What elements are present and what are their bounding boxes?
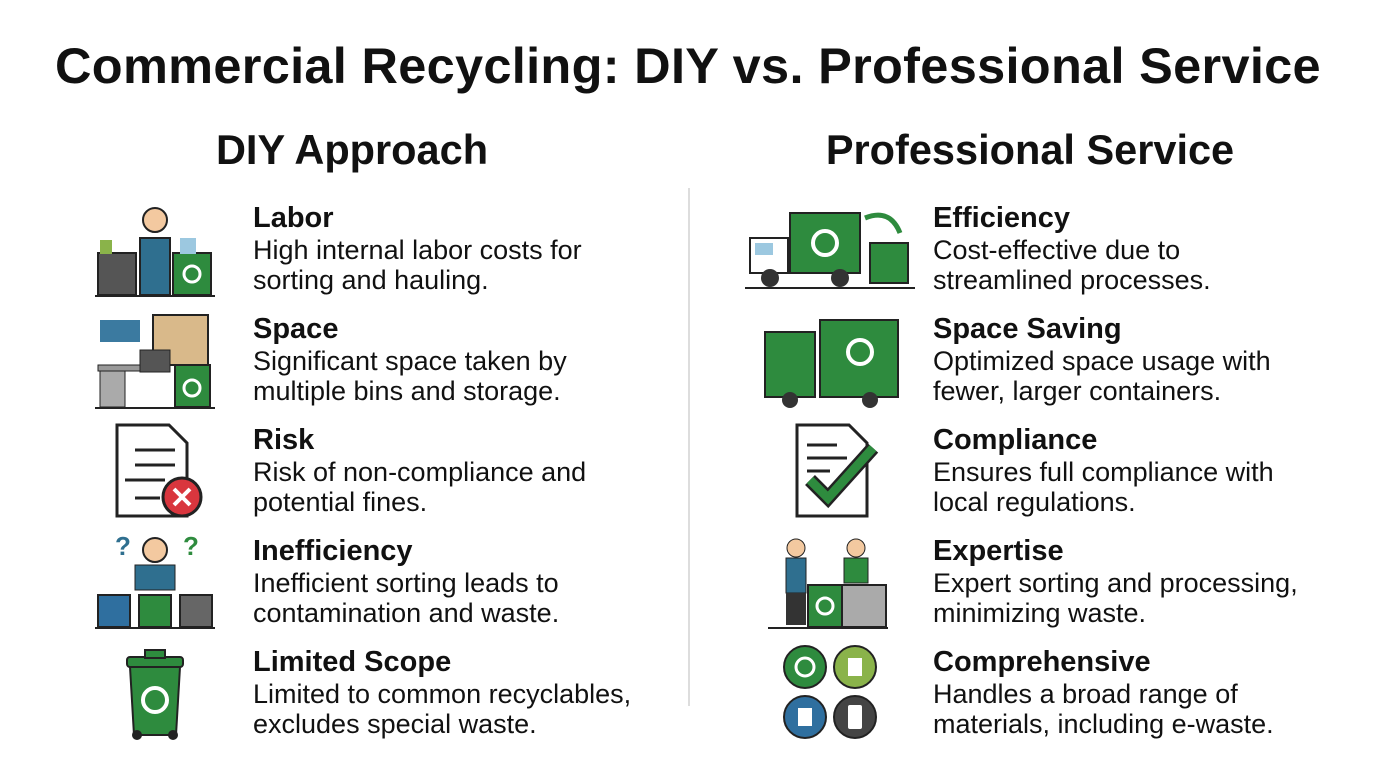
row: Inefficiency <box>253 535 559 628</box>
row: Space: Significant space taken by <box>253 346 567 376</box>
row: Compliance: Compliance <box>933 424 1097 456</box>
row: Efficiency <box>933 202 1211 295</box>
icon: document with check <box>796 424 878 518</box>
row: Space Saving: fewer, larger containers. <box>933 376 1221 406</box>
row: Space: Space <box>253 313 338 345</box>
row: Compliance: Ensures full compliance with <box>933 457 1274 487</box>
row: Compliance <box>933 424 1274 517</box>
title: Commercial Recycling: DIY vs. Professional Service <box>55 37 1321 94</box>
row: Inefficiency: Inefficient sorting leads to <box>253 568 559 598</box>
icon: confused person with bins <box>95 531 215 629</box>
row: Risk: Risk of non-compliance and <box>253 457 586 487</box>
row: Labor <box>253 202 582 295</box>
row: Expertise: Expertise <box>933 535 1064 567</box>
icon: confused person with bins: ? <box>183 531 199 561</box>
icon: document with red x <box>116 424 202 518</box>
row: Labor: High internal labor costs for <box>253 235 582 265</box>
icon: four material circles <box>783 645 877 739</box>
row: Efficiency: Efficiency <box>933 202 1070 234</box>
row: Expertise <box>933 535 1298 628</box>
row: Comprehensive: Comprehensive <box>933 646 1151 678</box>
row: Compliance: local regulations. <box>933 487 1136 517</box>
row: Efficiency: Cost-effective due to <box>933 235 1180 265</box>
row: Limited Scope: Limited Scope <box>253 646 451 678</box>
row: Space Saving: Space Saving <box>933 313 1122 345</box>
icon: stressed worker with bins <box>95 207 215 297</box>
row: Limited Scope: excludes special waste. <box>253 709 537 739</box>
row: Limited Scope <box>253 646 631 739</box>
row: Comprehensive: materials, including e-waste. <box>933 709 1274 739</box>
row: Space: multiple bins and storage. <box>253 376 561 406</box>
icon: single green bin <box>126 649 184 740</box>
row: Risk: potential fines. <box>253 487 427 517</box>
icon: recycling truck <box>745 212 915 289</box>
row: Expertise: Expert sorting and processing, <box>933 568 1298 598</box>
row: Efficiency: streamlined processes. <box>933 265 1211 295</box>
row: Space Saving <box>933 313 1271 406</box>
icon: workers sorting <box>768 538 888 629</box>
icon: cluttered office <box>95 314 215 409</box>
icon: large container <box>764 319 899 408</box>
row: Comprehensive <box>933 646 1274 739</box>
row: Space Saving: Optimized space usage with <box>933 346 1271 376</box>
row: Limited Scope: Limited to common recyclables, <box>253 679 631 709</box>
heading: Professional: Professional Service <box>826 126 1234 173</box>
row: Space <box>253 313 567 406</box>
row: Comprehensive: Handles a broad range of <box>933 679 1238 709</box>
row: Inefficiency: Inefficiency <box>253 535 413 567</box>
row: Inefficiency: contamination and waste. <box>253 598 559 628</box>
row: Risk: Risk <box>253 424 314 456</box>
row: Expertise: minimizing waste. <box>933 598 1146 628</box>
heading: DIY: DIY Approach <box>216 126 488 173</box>
row: Labor: sorting and hauling. <box>253 265 489 295</box>
icon: confused person with bins: ? <box>115 531 131 561</box>
row: Risk <box>253 424 586 517</box>
row: Labor: Labor <box>253 202 334 234</box>
